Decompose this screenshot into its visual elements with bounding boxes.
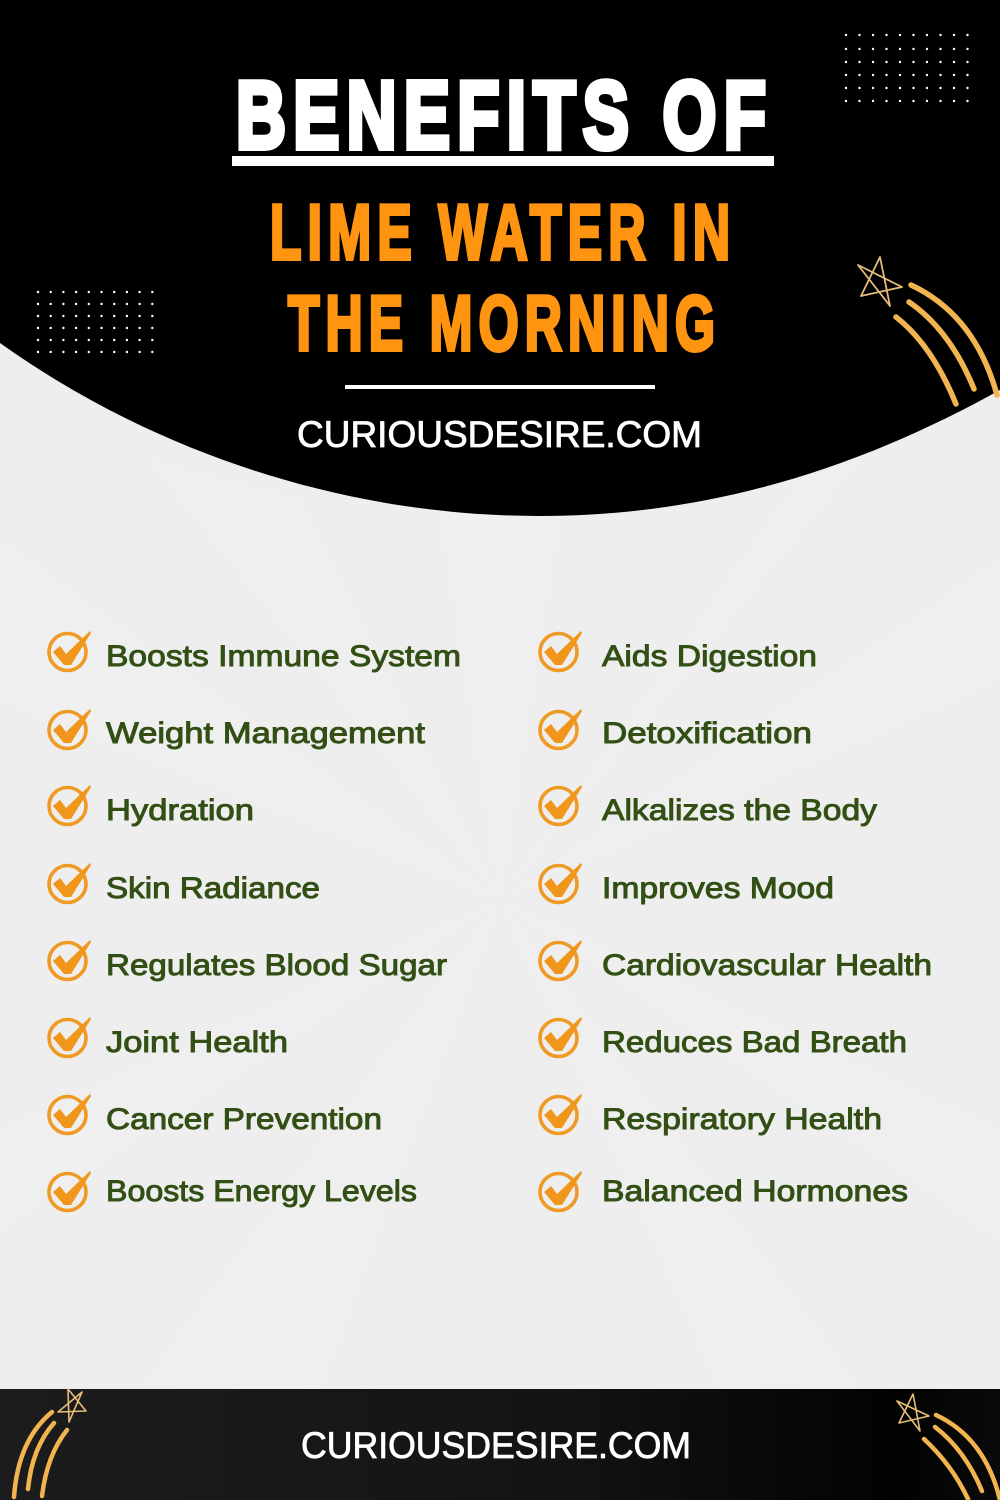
item: detoxification bbox=[540, 709, 812, 750]
item: aids digestion bbox=[540, 631, 817, 673]
item: cancer prevention: Cancer Prevention bbox=[106, 1103, 382, 1136]
item: cardiovascular health: Cardiovascular Health bbox=[602, 949, 932, 982]
dot grid: top right bbox=[845, 34, 969, 102]
item: balanced hormones bbox=[540, 1171, 908, 1210]
item: boosts immune system: Boosts Immune System bbox=[106, 640, 461, 673]
item: alkalizes the body: Alkalizes the Body bbox=[602, 794, 877, 827]
icon: shooting star footer right bbox=[897, 1394, 1000, 1500]
item: detoxification: Detoxification bbox=[602, 717, 812, 750]
subtitle line 1: LIME WATER IN bbox=[270, 189, 730, 277]
item: regulates blood sugar: Regulates Blood Sugar bbox=[106, 949, 447, 982]
dot grid: left bbox=[37, 291, 153, 353]
footer website url: CURIOUSDESIRE.COM bbox=[301, 1425, 691, 1466]
item: respiratory health bbox=[540, 1094, 882, 1136]
header divider bbox=[345, 385, 655, 389]
title: benefits of: BENEFITS OF bbox=[236, 61, 766, 169]
item: skin radiance: Skin Radiance bbox=[106, 872, 320, 905]
item: boosts energy levels: Boosts Energy Levels bbox=[106, 1175, 417, 1208]
item: reduces bad breath: Reduces Bad Breath bbox=[602, 1026, 907, 1059]
item: respiratory health: Respiratory Health bbox=[602, 1103, 882, 1136]
list: right column bbox=[540, 631, 932, 1210]
item: boosts energy levels bbox=[49, 1171, 417, 1210]
icon: shooting star top right bbox=[858, 257, 997, 404]
item: improves mood bbox=[540, 863, 834, 905]
list: left column bbox=[49, 631, 461, 1210]
item: alkalizes the body bbox=[540, 785, 877, 827]
item: hydration: Hydration bbox=[106, 794, 254, 827]
item: cancer prevention bbox=[49, 1094, 382, 1136]
item: reduces bad breath bbox=[540, 1017, 907, 1059]
item: hydration bbox=[49, 785, 254, 827]
panel: footer band bbox=[0, 1389, 1000, 1500]
panel: black header with curved edge bbox=[0, 0, 1000, 516]
item: cardiovascular health bbox=[540, 940, 932, 982]
item: joint health bbox=[49, 1017, 288, 1059]
subtitle line 2: THE MORNING bbox=[288, 280, 715, 368]
item: improves mood: Improves Mood bbox=[602, 872, 834, 905]
item: joint health: Joint Health bbox=[106, 1026, 288, 1059]
header website url: CURIOUSDESIRE.COM bbox=[297, 414, 702, 455]
item: skin radiance bbox=[49, 863, 320, 905]
item: weight management: Weight Management bbox=[106, 717, 426, 750]
title underline bbox=[232, 156, 774, 166]
item: regulates blood sugar bbox=[49, 940, 447, 982]
item: boosts immune system bbox=[49, 631, 461, 673]
item: weight management bbox=[49, 709, 426, 750]
item: balanced hormones: Balanced Hormones bbox=[602, 1175, 908, 1208]
item: aids digestion: Aids Digestion bbox=[602, 640, 817, 673]
icon: shooting star footer left bbox=[14, 1389, 86, 1497]
